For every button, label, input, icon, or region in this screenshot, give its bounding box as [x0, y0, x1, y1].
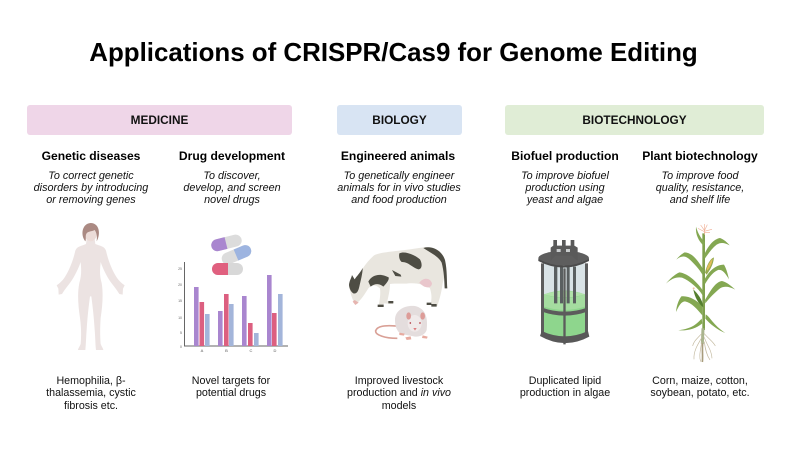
icon: rat: [376, 306, 428, 340]
column heading: engineered animals: Engineered animals: [341, 149, 455, 163]
description: genetic diseases: disorders by introducing: [34, 182, 148, 194]
icon: corn plant: [666, 224, 735, 362]
icon: bar chart: 15: [178, 299, 182, 303]
outcome text: engineered animals: [347, 375, 451, 412]
description: biofuel production: production using: [525, 182, 605, 194]
description: plant biotechnology: To improve food: [661, 170, 739, 182]
icon: bar chart: A: [201, 348, 204, 353]
outcome text: engineered animals: Improved livestock: [355, 375, 443, 387]
icon: bar chart: 0: [180, 345, 182, 349]
icon: human body: [57, 223, 125, 350]
outcome text: plant biotechnology: Corn, maize, cotton,: [652, 375, 748, 387]
column heading: drug development: Drug development: [179, 149, 285, 163]
icon: bar chart: 10: [178, 316, 182, 320]
outcome text: plant biotechnology: [650, 375, 750, 399]
description: genetic diseases: or removing genes: [46, 194, 136, 206]
icon: bar chart: 25: [178, 267, 182, 271]
description: biofuel production: To improve biofuel: [521, 170, 609, 182]
outcome text: biofuel production: Duplicated lipid: [529, 375, 601, 387]
heading band: biotechnology: [505, 105, 764, 135]
description: genetic diseases: To correct genetic: [48, 170, 134, 182]
column heading: plant biotechnology: Plant biotechnology: [642, 149, 758, 163]
description: drug development: novel drugs: [204, 194, 260, 206]
description: engineered animals: and food production: [351, 194, 447, 206]
icon: bar chart: D: [274, 348, 277, 353]
outcome text: biofuel production: [520, 375, 610, 399]
outcome text: genetic diseases: [46, 375, 136, 412]
heading band: biology: BIOLOGY: [372, 113, 427, 127]
title: Applications of CRISPR/Cas9 for Genome Editing: [89, 39, 698, 67]
outcome text: drug development: potential drugs: [196, 387, 266, 399]
outcome text: genetic diseases: fibrosis etc.: [64, 400, 118, 412]
heading band: medicine: MEDICINE: [131, 113, 188, 127]
description: drug development: develop, and screen: [183, 182, 281, 194]
outcome text: genetic diseases: thalassemia, cystic: [46, 387, 136, 399]
column heading: biofuel production: Biofuel production: [511, 149, 619, 163]
description: plant biotechnology: and shelf life: [670, 194, 730, 206]
icon: bar chart: 5: [180, 331, 182, 335]
outcome text: drug development: Novel targets for: [192, 375, 270, 387]
outcome text: biofuel production: production in algae: [520, 387, 610, 399]
heading band: biotechnology: BIOTECHNOLOGY: [582, 113, 687, 127]
icon: bar chart: B: [225, 348, 228, 353]
icon: bar chart: [178, 262, 288, 353]
description: biofuel production: yeast and algae: [527, 194, 603, 206]
description: genetic diseases: [34, 170, 148, 206]
icon: bar chart: C: [250, 348, 253, 353]
description: plant biotechnology: [656, 170, 744, 206]
outcome text: engineered animals: production and in vivo: [347, 387, 451, 399]
icon: bar chart: 20: [178, 283, 182, 287]
description: drug development: [183, 170, 281, 206]
outcome text: plant biotechnology: soybean, potato, etc.: [650, 387, 750, 399]
icon: cow: [349, 247, 447, 307]
description: plant biotechnology: quality, resistance,: [656, 182, 744, 194]
description: engineered animals: To genetically engineer: [344, 170, 454, 182]
description: engineered animals: animals for in vivo studies: [337, 182, 461, 194]
column heading: genetic diseases: Genetic diseases: [42, 149, 140, 163]
heading band: biology: [337, 105, 462, 135]
description: biofuel production: [521, 170, 610, 206]
heading band: medicine: [27, 105, 292, 135]
outcome text: drug development: [192, 375, 270, 399]
icon: pills: [210, 233, 253, 275]
description: drug development: To discover,: [203, 170, 261, 182]
description: engineered animals: [337, 170, 461, 206]
outcome text: genetic diseases: Hemophilia, β-: [56, 375, 126, 387]
outcome text: engineered animals: models: [382, 400, 416, 412]
icon: bioreactor: [538, 240, 589, 344]
